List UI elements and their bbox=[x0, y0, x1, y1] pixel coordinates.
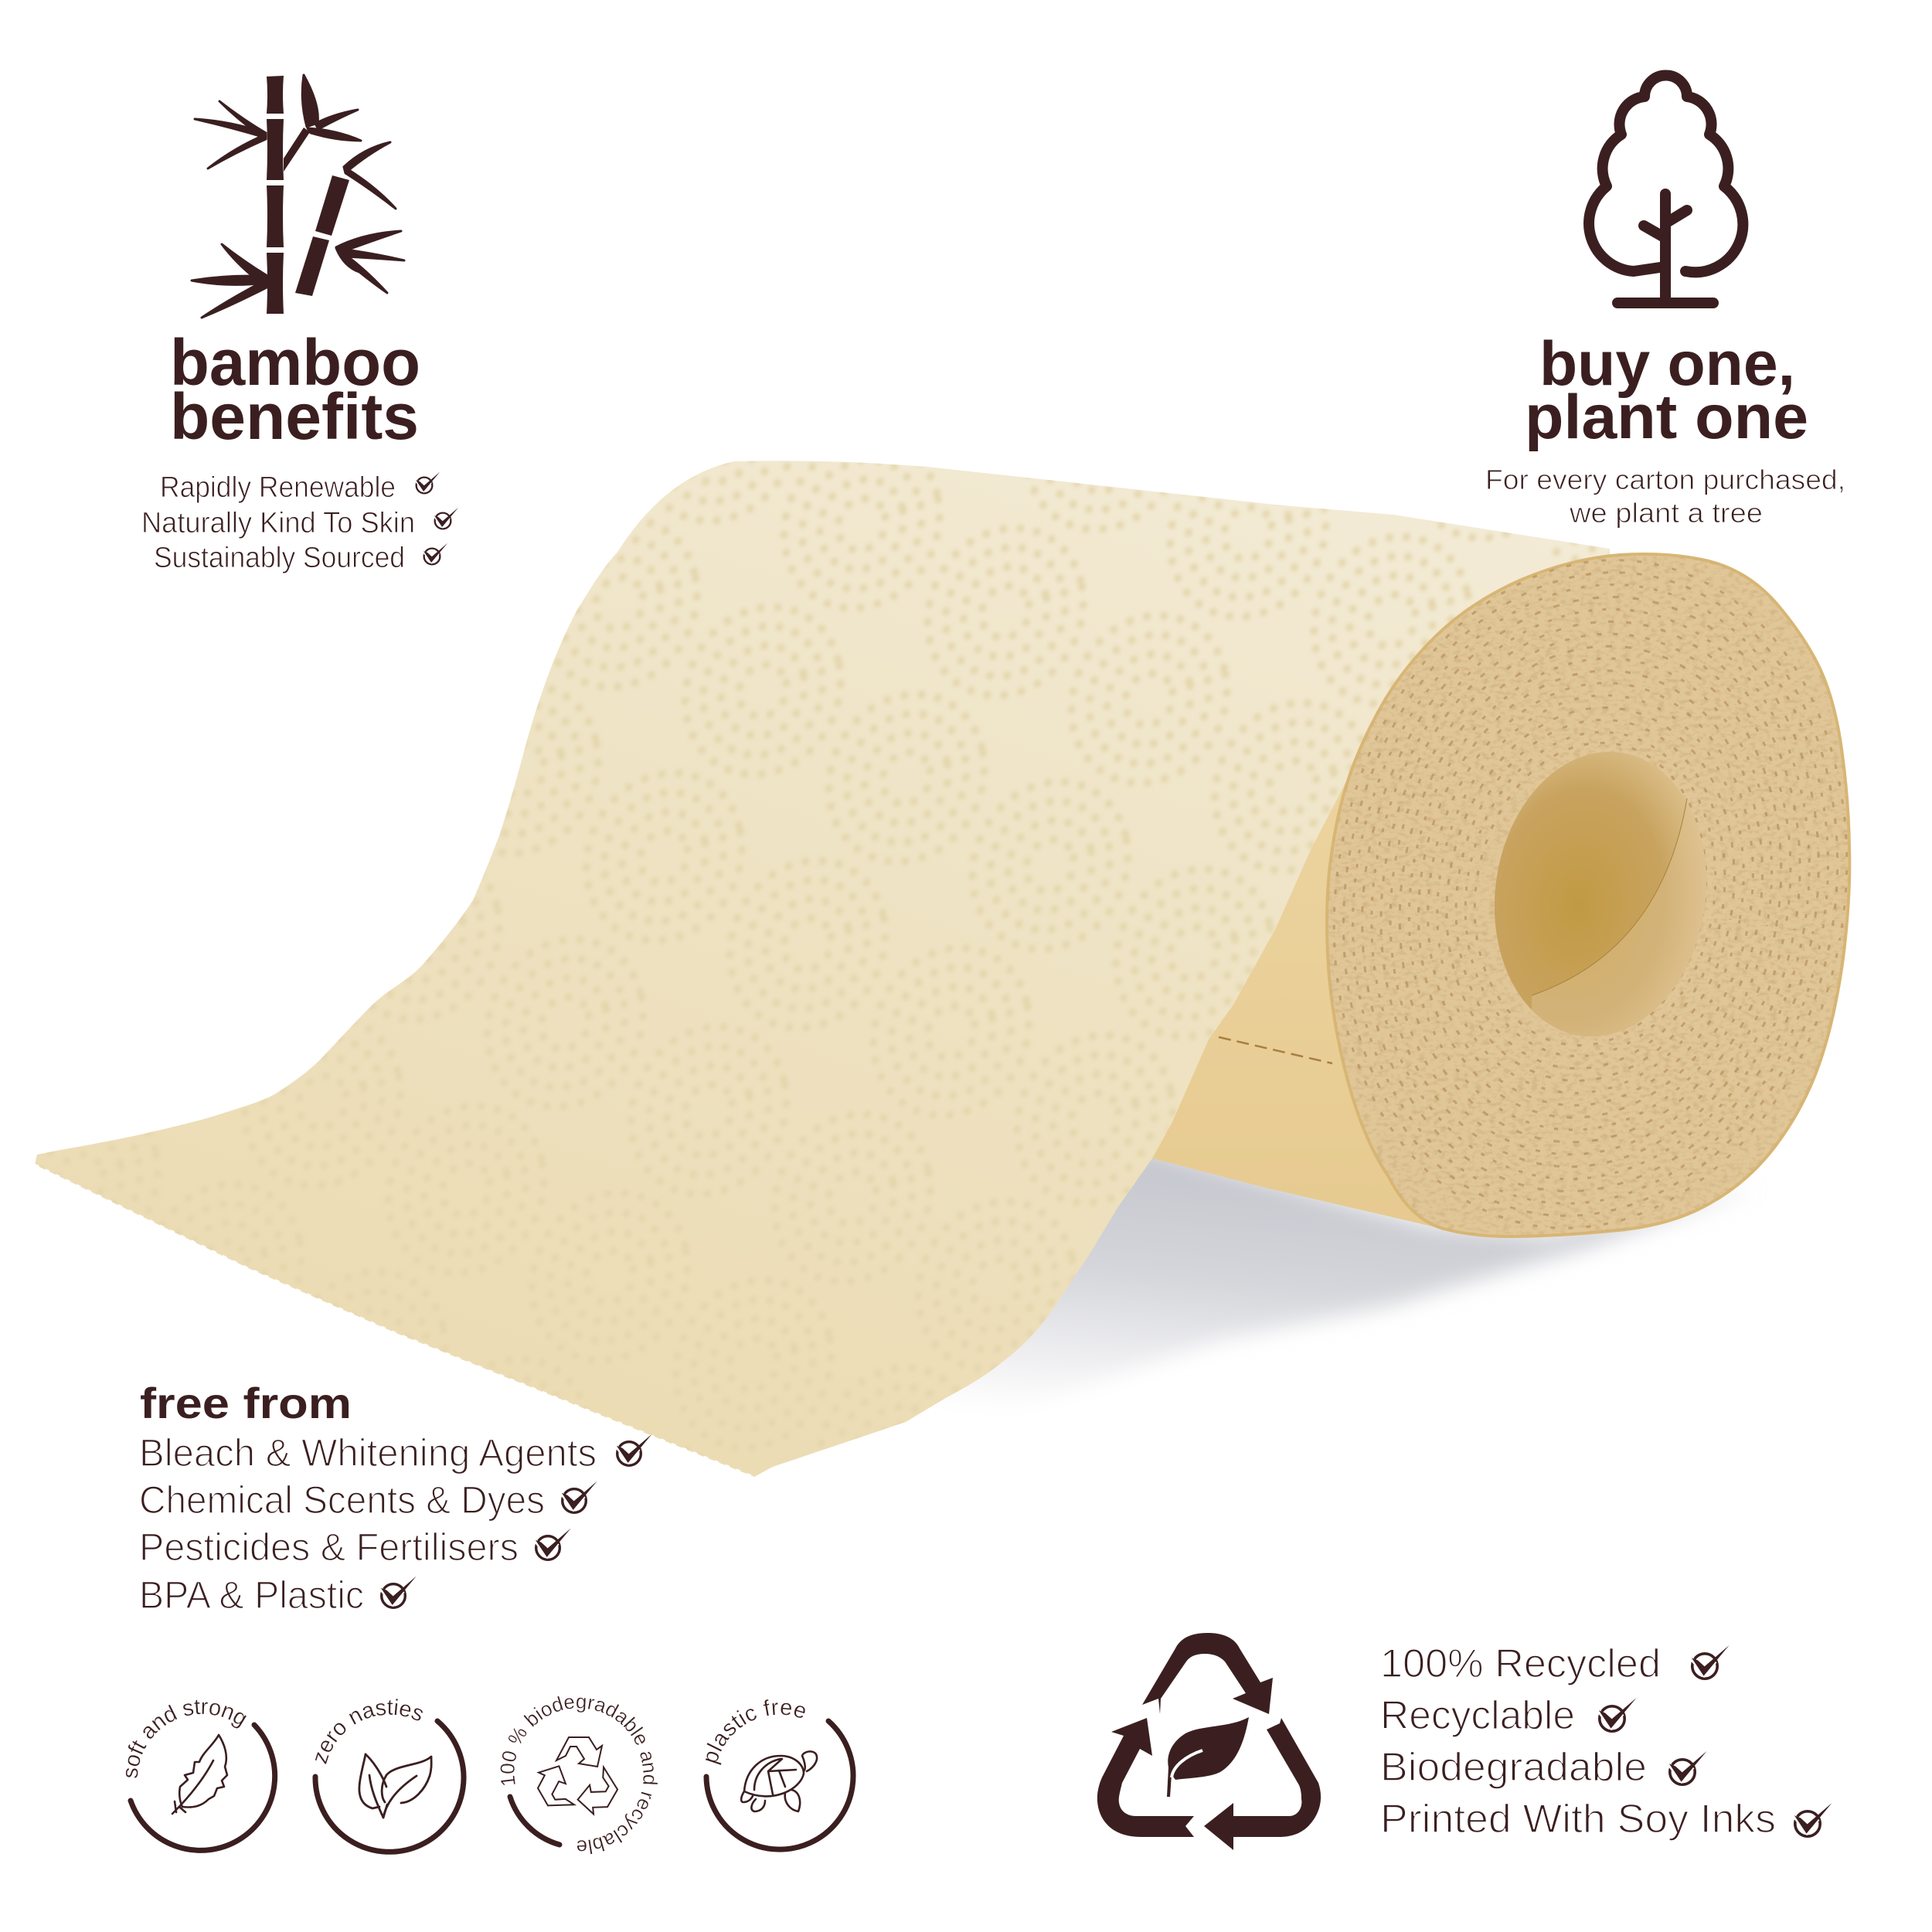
cardboard core hole bbox=[1495, 752, 1706, 1037]
unrolled embossed sheet bbox=[0, 433, 1662, 1499]
heading: bamboo benefits: benefits bbox=[170, 380, 419, 453]
icon: turtle bbox=[741, 1751, 817, 1811]
text: tree planting note: we plant a tree bbox=[1569, 497, 1763, 529]
item: bleach and whitening agents: Bleach & Whitening Agents bbox=[139, 1431, 597, 1475]
badge: plastic free bbox=[703, 1699, 856, 1852]
badge: biodegradable and recyclable: 100 % biodegradable and recyclable bbox=[501, 1696, 658, 1855]
panel: recycled credentials bbox=[1380, 1641, 1832, 1842]
icon: bamboo bbox=[192, 75, 404, 318]
badge: zero nasties bbox=[312, 1699, 467, 1855]
panel: bamboo benefits bbox=[141, 75, 458, 574]
heading: buy one plant one: plant one bbox=[1525, 383, 1808, 452]
underside of roll bbox=[1136, 734, 1468, 1230]
icon: leaves bbox=[359, 1754, 431, 1818]
list: bamboo benefits bbox=[141, 471, 458, 574]
item: biodegradable: Biodegradable bbox=[1380, 1745, 1647, 1790]
item: naturally kind to skin: Naturally Kind To Skin bbox=[141, 507, 415, 539]
icon: recycle arrows bbox=[531, 1737, 624, 1818]
item: recyclable: Recyclable bbox=[1380, 1693, 1575, 1738]
badge: zero nasties: zero nasties bbox=[315, 1699, 423, 1764]
heading: buy one plant one bbox=[1525, 329, 1808, 452]
text: tree planting note bbox=[1485, 464, 1845, 529]
icon: large recycling symbol with leaf bbox=[1097, 1633, 1321, 1850]
item: rapidly renewable: Rapidly Renewable bbox=[160, 471, 396, 504]
heading: bamboo benefits bbox=[170, 326, 420, 453]
panel: free from bbox=[139, 1379, 652, 1617]
panel: buy one plant one bbox=[1485, 76, 1845, 529]
roll shadow on the floor bbox=[927, 1144, 1754, 1434]
item: bpa and plastic: BPA & Plastic bbox=[139, 1573, 364, 1617]
badge: plastic free: plastic free bbox=[705, 1699, 805, 1765]
item: printed with soy inks: Printed With Soy Inks bbox=[1380, 1797, 1776, 1842]
roll end face bbox=[1325, 553, 1852, 1238]
item: sustainably sourced: Sustainably Sourced bbox=[154, 542, 405, 574]
item: chemical scents and dyes: Chemical Scents & Dyes bbox=[139, 1478, 545, 1522]
icon: feather bbox=[172, 1735, 227, 1814]
icon: tree bbox=[1589, 76, 1743, 303]
heading: buy one plant one: buy one, bbox=[1539, 329, 1795, 399]
heading: bamboo benefits: bamboo bbox=[170, 326, 420, 399]
paper towel roll bbox=[0, 433, 1899, 1499]
item: 100% recycled: 100% Recycled bbox=[1380, 1641, 1661, 1686]
text: tree planting note: For every carton purchased, bbox=[1485, 464, 1845, 495]
badge: soft and strong: soft and strong bbox=[125, 1700, 247, 1778]
heading: free from: free from bbox=[140, 1379, 352, 1427]
item: pesticides and fertilisers: Pesticides & Fertilisers bbox=[139, 1526, 519, 1569]
badge: soft and strong bbox=[125, 1700, 278, 1853]
